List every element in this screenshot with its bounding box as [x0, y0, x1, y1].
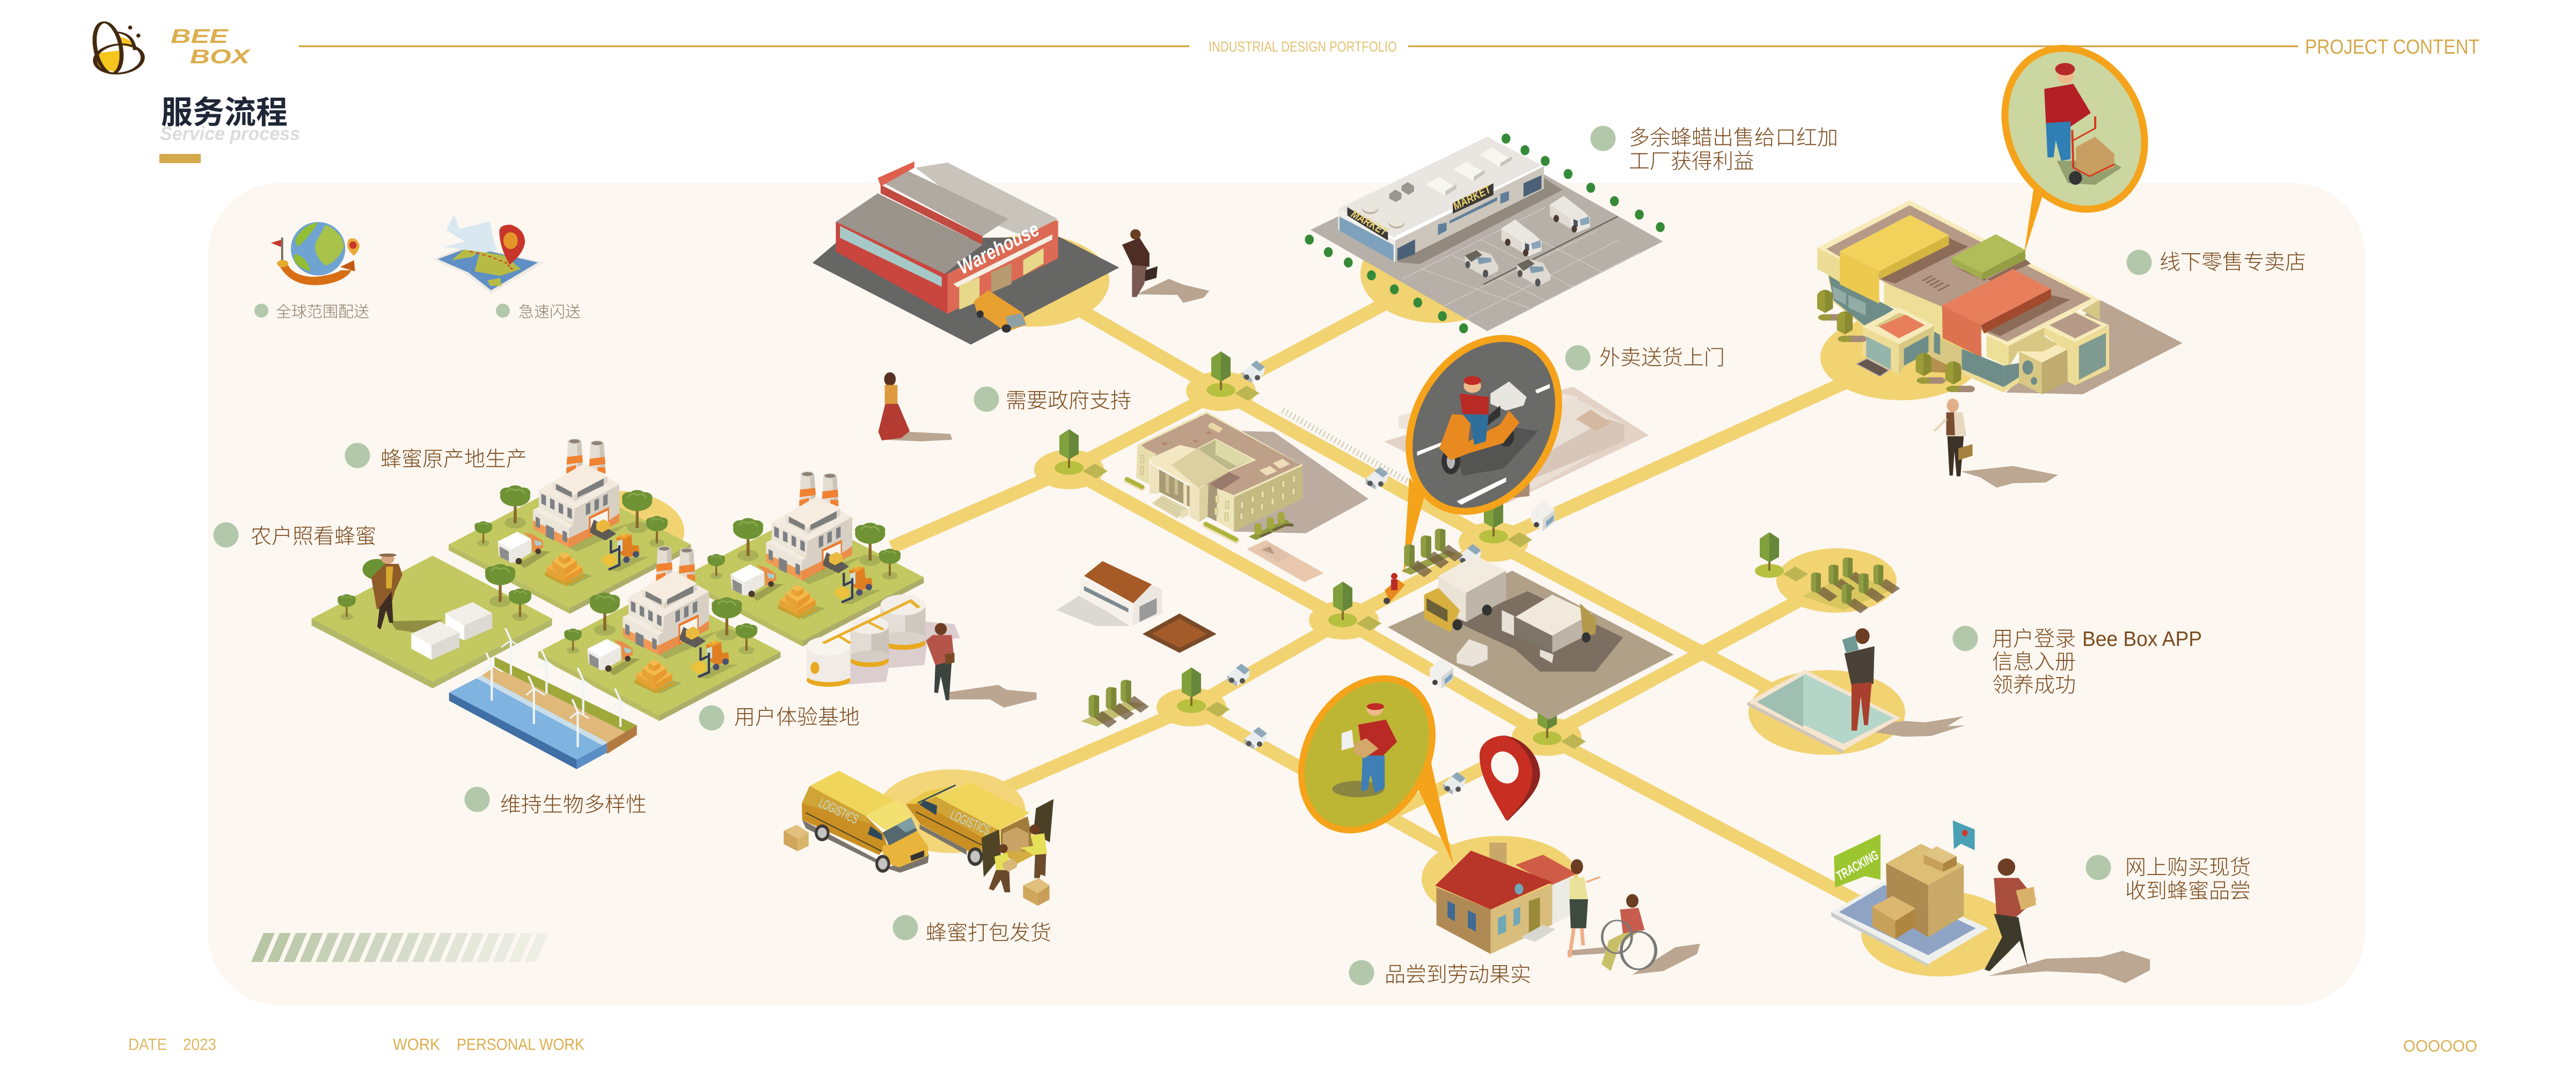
label: user experience base: 用户体验基地 — [734, 706, 860, 729]
label: honey origin production — [345, 443, 527, 471]
tracking sign text: TRACKING — [1834, 848, 1881, 884]
header centre text: INDUSTRIAL DESIGN PORTFOLIO — [1209, 39, 1397, 55]
label: online purchase: 收到蜂蜜品尝 — [2125, 880, 2251, 903]
label: global delivery: 全球范围配送 — [276, 303, 369, 321]
yellow roof block — [1840, 215, 1968, 304]
small scooter on road — [1384, 573, 1405, 604]
label: honey origin production: 蜂蜜原产地生产 — [380, 448, 527, 471]
house — [1435, 843, 1577, 954]
label: tasting the fruits of labor: 品尝到劳动果实 — [1385, 964, 1531, 987]
logo: bee icon — [91, 22, 147, 75]
man beside tanks — [926, 623, 1037, 708]
fence — [1283, 410, 1410, 483]
label: tasting the fruits of labor — [1349, 960, 1531, 987]
logistics vans — [784, 771, 1053, 906]
label: surplus beeswax: 工厂获得利益 — [1629, 150, 1754, 173]
label: biodiversity: 维持生物多样性 — [500, 793, 647, 817]
label: farmers tending bees: 农户照看蜂蜜 — [251, 525, 376, 548]
label: app login and adoption: 领养成功 — [1992, 674, 2076, 697]
icon: map, plane and pin — [433, 215, 544, 293]
label: home delivery: 外卖送货上门 — [1599, 347, 1725, 370]
callout bubble: scooter delivery — [1379, 311, 1589, 575]
label: farmers tending bees — [214, 523, 376, 548]
van lettering: LOGISTICS — [816, 795, 861, 827]
woman and wheelchair user — [1568, 859, 1700, 974]
market sign texts: MARKET — [1349, 208, 1391, 239]
workers and parcels — [989, 825, 1050, 906]
van lettering — [816, 795, 992, 838]
footer date: 2023 — [183, 1035, 216, 1054]
businessman with briefcase — [1122, 229, 1210, 303]
market sign texts — [1349, 183, 1494, 239]
van in front — [784, 771, 929, 873]
header right text: PROJECT CONTENT — [2305, 36, 2479, 58]
green roof block — [1952, 234, 2031, 281]
destination circles — [550, 224, 2017, 976]
decorative stripe progress bar — [251, 933, 548, 962]
delivery building behind scooter — [1384, 387, 1649, 504]
footer page code: OOOOOO — [2403, 1037, 2477, 1055]
label: honey packing and shipping: 蜂蜜打包发货 — [926, 922, 1051, 945]
road junctions with trees — [1034, 351, 1808, 756]
factory plots — [449, 439, 924, 721]
footer work: PERSONAL WORK — [457, 1035, 584, 1054]
label: surplus beeswax: 多余蜂蜡出售给口红加 — [1629, 127, 1838, 150]
label: express delivery: 急速闪送 — [518, 303, 581, 321]
farm plot trees — [338, 564, 531, 621]
phone with parcels and shopper — [1831, 820, 2150, 983]
road network — [891, 275, 1939, 944]
right block — [2044, 311, 2109, 385]
small bushes — [1081, 680, 1149, 728]
man with coffee — [1934, 399, 2058, 488]
bushes beside scooter callout — [1401, 528, 1463, 577]
label: app login and adoption: 信息入册 — [1992, 651, 2076, 674]
callout bubble: hand truck worker — [1979, 25, 2170, 255]
label: app login and adoption: Bee Box APP — [2082, 628, 2202, 651]
footer date: DATE — [128, 1035, 167, 1054]
label: online purchase: 网上购买现货 — [2125, 856, 2251, 879]
retail store — [1817, 200, 2183, 394]
van at rear, loading — [906, 782, 1053, 877]
label: government support: 需要政府支持 — [1006, 389, 1131, 413]
market — [1305, 134, 1665, 333]
trucks yard — [1388, 555, 1674, 719]
label: online purchase — [2085, 855, 2251, 903]
callout bubble: courier with parcel — [1275, 655, 1459, 865]
title accent bar — [159, 154, 201, 163]
oil tanks — [807, 594, 960, 687]
map pin — [1480, 736, 1540, 821]
subtitle: Service process — [160, 123, 300, 144]
warehouse — [813, 161, 1119, 344]
barn and crop field — [1056, 561, 1217, 653]
farm plot with farmer — [312, 554, 552, 688]
logo wordmark: BEE — [171, 25, 229, 47]
footer work — [393, 1035, 584, 1054]
logo wordmark: BOX — [190, 46, 251, 68]
orange roof block — [1942, 269, 2070, 357]
offshore wind farm — [449, 628, 637, 769]
title: 服务流程 — [161, 87, 288, 133]
logo wordmark — [171, 25, 251, 68]
entry block — [2019, 344, 2067, 394]
label: surplus beeswax — [1591, 126, 1838, 173]
small vehicles on roads — [1227, 361, 1555, 795]
warehouse sign text: Warehouse — [954, 218, 1043, 279]
label: biodiversity — [465, 787, 647, 817]
icon: globe with route arrow — [271, 222, 360, 285]
header rule right — [1408, 45, 2298, 47]
footer date — [128, 1035, 216, 1054]
van lettering: LOGISTICS — [948, 807, 992, 838]
label: honey packing and shipping — [893, 915, 1051, 945]
footer work: WORK — [393, 1035, 440, 1054]
label: app login and adoption — [1952, 626, 2202, 697]
government building — [1127, 411, 1368, 582]
label: offline retail store: 线下零售专卖店 — [2160, 251, 2306, 274]
phone with man looking at tablet — [1747, 628, 1965, 754]
panel: service process background — [208, 183, 2365, 1005]
header rule left — [299, 45, 1189, 47]
porch — [1856, 307, 1935, 377]
market sign texts: MARKET — [1451, 183, 1494, 212]
label: app login and adoption: 用户登录 — [1992, 628, 2076, 651]
woman in red dress — [879, 372, 952, 442]
bushes on round plaza — [1802, 557, 1900, 613]
